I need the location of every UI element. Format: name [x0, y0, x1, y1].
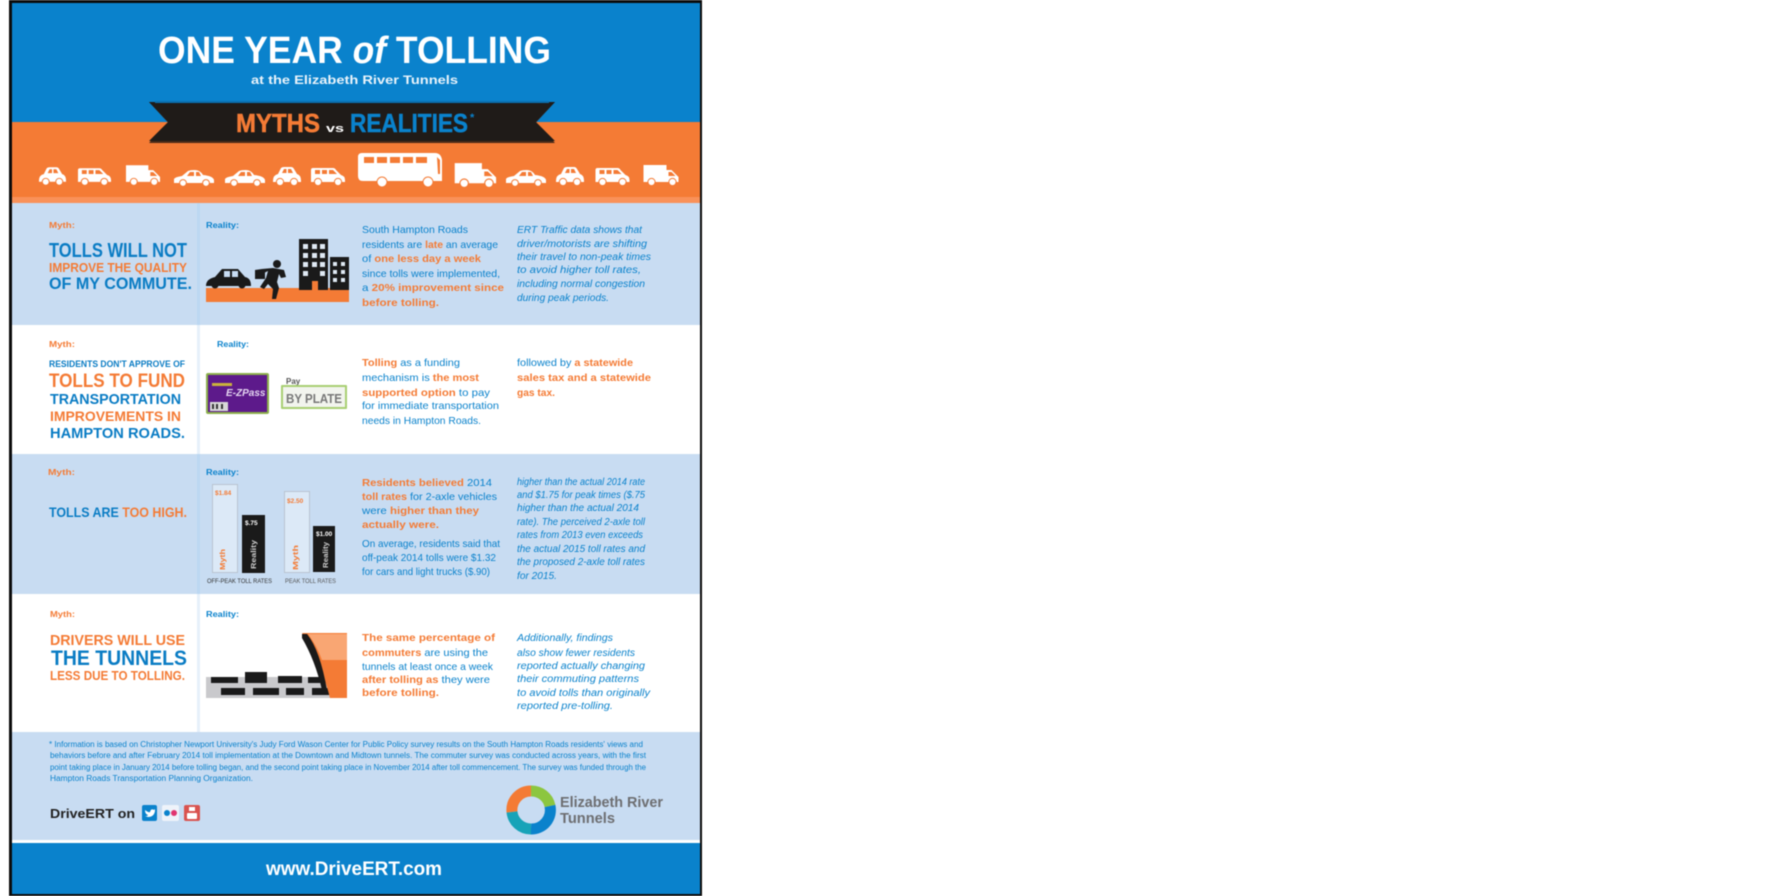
icon: cars entering tunnel — [206, 633, 347, 698]
reality text: for immediate transportation — [362, 400, 499, 412]
reality text: a 20% improvement since — [362, 282, 504, 294]
reality text: of one less day a week — [362, 253, 481, 265]
myth heading: DRIVERS WILL USE — [50, 633, 185, 649]
logo: Elizabeth River Tunnels: Tunnels — [560, 810, 615, 827]
footnote text: * Information is based on Christopher Newport University's Judy Ford Wason Center for Public Policy survey results on the South Hampton Roads residents' views and — [49, 740, 643, 749]
supporting text: to avoid higher toll rates, — [517, 265, 641, 276]
supporting text: and $1.75 for peak times ($.75 — [517, 490, 645, 501]
bar: actual peak: $1.00 — [316, 531, 333, 538]
reality text: The same percentage of — [362, 632, 496, 644]
supporting text: to avoid tolls than originally — [517, 688, 651, 699]
supporting text — [517, 225, 651, 304]
supporting text: reported actually changing — [517, 661, 645, 672]
panel: reality 4 — [206, 610, 651, 712]
supporting text — [517, 477, 646, 582]
ribbon banner: myths vs realities: vs — [326, 123, 344, 135]
supporting text: during peak periods. — [517, 293, 609, 304]
supporting text: reported pre-tolling. — [517, 701, 613, 712]
reality text: Residents believed 2014 — [362, 477, 492, 489]
bar chart: perceived vs actual tolls — [207, 484, 336, 585]
bar: actual off-peak: $.75 — [245, 520, 258, 527]
myth heading: TOLLS ARE TOO HIGH. — [49, 504, 187, 520]
bar: perceived off-peak: $1.84 — [215, 490, 232, 497]
panel: myth 2 — [49, 340, 185, 442]
reality text: off-peak 2014 tolls were $1.32 — [362, 552, 496, 564]
social links — [50, 805, 200, 821]
title: at the Elizabeth River Tunnels — [251, 75, 458, 87]
header band — [12, 3, 700, 122]
supporting text — [517, 357, 651, 399]
logo: Elizabeth River Tunnels — [512, 791, 663, 829]
myth label: Myth: — [48, 468, 75, 477]
icon: pay by plate — [281, 377, 347, 409]
poster frame — [9, 0, 702, 896]
reality text: were higher than they — [361, 505, 479, 517]
ribbon banner: myths vs realities: MYTHS — [236, 108, 320, 138]
reality text: tunnels at least once a week — [362, 661, 494, 673]
supporting text: their travel to non-peak times — [517, 252, 651, 263]
myth heading: TOLLS WILL NOT — [49, 240, 187, 262]
footnote text: point taking place in January 2014 before tolling began, and the second point taking place in November 2014 after toll commencement. The survey was funded through the — [50, 763, 647, 772]
myth label: Myth: — [49, 221, 75, 230]
bar: perceived peak: $2.50 — [287, 498, 304, 505]
supporting text: including normal congestion — [517, 279, 645, 290]
panel: reality 1 — [206, 221, 651, 309]
reality text: since tolls were implemented, — [362, 268, 500, 280]
reality text — [362, 357, 499, 427]
supporting text: driver/motorists are shifting — [517, 239, 647, 250]
myth label: Myth: — [49, 340, 75, 349]
reality text: On average, residents said that — [362, 538, 500, 550]
supporting text: Additionally, findings — [516, 633, 613, 644]
bar: perceived off-peak — [212, 484, 238, 572]
myth heading — [49, 240, 192, 293]
reality text: commuters are using the — [362, 647, 488, 659]
myth heading — [50, 633, 187, 683]
reality text: mechanism is the most — [362, 372, 480, 384]
reality label: Reality: — [206, 221, 239, 230]
footnote text: Hampton Roads Transportation Planning Organization. — [50, 774, 253, 783]
myth label: Myth: — [50, 610, 75, 619]
bar: actual off-peak: Reality — [251, 540, 258, 569]
myth heading: IMPROVE THE QUALITY — [49, 261, 188, 275]
footnote text — [49, 740, 647, 783]
icon: twitter — [142, 805, 157, 821]
footer band with website — [12, 843, 700, 894]
bar: actual peak: Reality — [323, 542, 330, 568]
reality text: before tolling. — [362, 687, 439, 699]
reality text: for cars and light trucks ($.90) — [362, 566, 490, 578]
panel: reality 2 — [206, 340, 651, 427]
icon: car, runner and office buildings — [206, 239, 349, 302]
reality text — [361, 477, 500, 578]
myth heading: LESS DUE TO TOLLING. — [50, 669, 185, 683]
icon: E-ZPass card — [206, 373, 269, 414]
reality text: needs in Hampton Roads. — [362, 415, 481, 427]
logo: Elizabeth River Tunnels: Elizabeth River — [560, 794, 663, 811]
axis labels — [207, 579, 336, 585]
supporting text — [516, 633, 651, 712]
panel: row backgrounds — [12, 203, 700, 840]
axis labels: PEAK TOLL RATES — [285, 579, 336, 585]
bar: perceived off-peak: Myth — [220, 549, 227, 570]
reality text: residents are late an average — [362, 239, 498, 251]
supporting text: the actual 2015 toll rates and — [517, 544, 645, 555]
ribbon banner: myths vs realities: * — [470, 112, 475, 124]
social links: DriveERT on — [50, 806, 135, 821]
supporting text: the proposed 2-axle toll rates — [517, 557, 645, 568]
reality label: Reality: — [206, 468, 239, 477]
reality text: South Hampton Roads — [362, 224, 468, 236]
panel: reality 3 — [206, 468, 646, 585]
reality text: before tolling. — [362, 297, 439, 309]
axis labels: OFF-PEAK TOLL RATES — [207, 579, 272, 585]
ribbon banner: myths vs realities — [149, 101, 555, 143]
supporting text: gas tax. — [517, 387, 555, 399]
title: ONE YEAR of TOLLING — [158, 30, 551, 72]
supporting text: rate). The perceived 2-axle toll — [517, 517, 646, 528]
myth heading: HAMPTON ROADS. — [50, 425, 185, 442]
ribbon banner: myths vs realities: REALITIES — [350, 108, 468, 138]
reality text: toll rates for 2-axle vehicles — [362, 491, 497, 503]
reality text: Tolling as a funding — [362, 357, 460, 369]
vehicles row — [39, 153, 678, 188]
supporting text: also show fewer residents — [517, 648, 635, 659]
icon: E-ZPass card: E-ZPass — [226, 388, 266, 399]
supporting text: for 2015. — [517, 571, 557, 582]
reality text: actually were. — [362, 519, 439, 531]
supporting text: their commuting patterns — [517, 674, 639, 685]
reality text: after tolling as they were — [362, 674, 490, 686]
myth heading: OF MY COMMUTE. — [49, 274, 192, 293]
icon: pay by plate: BY PLATE — [286, 391, 342, 406]
bar: actual peak — [313, 526, 335, 572]
panel: myth 3 — [48, 468, 187, 520]
reality text: supported option to pay — [362, 387, 491, 399]
footnote text: behaviors before and after February 2014 toll implementation at the Downtown and Midtown tunnels. The commuter survey was conducted across years, with the first — [50, 751, 647, 760]
myth heading: TRANSPORTATION — [50, 391, 181, 408]
reality text — [362, 224, 504, 309]
myth heading: THE TUNNELS — [51, 647, 187, 670]
footer band with website: www.DriveERT.com — [265, 859, 442, 880]
supporting text: ERT Traffic data shows that — [517, 225, 643, 236]
myth heading: RESIDENTS DON'T APPROVE OF — [49, 359, 185, 370]
supporting text: followed by a statewide — [517, 357, 633, 369]
reality label: Reality: — [217, 340, 249, 349]
reality text — [362, 632, 496, 699]
myth heading: IMPROVEMENTS IN — [50, 408, 181, 424]
myth heading: TOLLS TO FUND — [49, 371, 185, 392]
supporting text: higher than the actual 2014 — [517, 503, 639, 514]
bar: perceived peak — [284, 492, 310, 572]
icon: pay by plate: Pay — [286, 377, 301, 386]
myth heading — [49, 359, 185, 442]
supporting text: sales tax and a statewide — [517, 372, 651, 384]
reality label: Reality: — [206, 610, 239, 619]
bar: actual off-peak — [242, 515, 265, 573]
supporting text: higher than the actual 2014 rate — [517, 477, 645, 488]
supporting text: rates from 2013 even exceeds — [517, 530, 643, 541]
bar: perceived peak: Myth — [293, 545, 300, 570]
icon: flickr — [162, 805, 179, 821]
panel: myth 1 — [49, 221, 192, 293]
orange vehicle band — [12, 122, 700, 203]
panel: myth 4 — [50, 610, 187, 683]
icon: youtube — [184, 805, 200, 821]
